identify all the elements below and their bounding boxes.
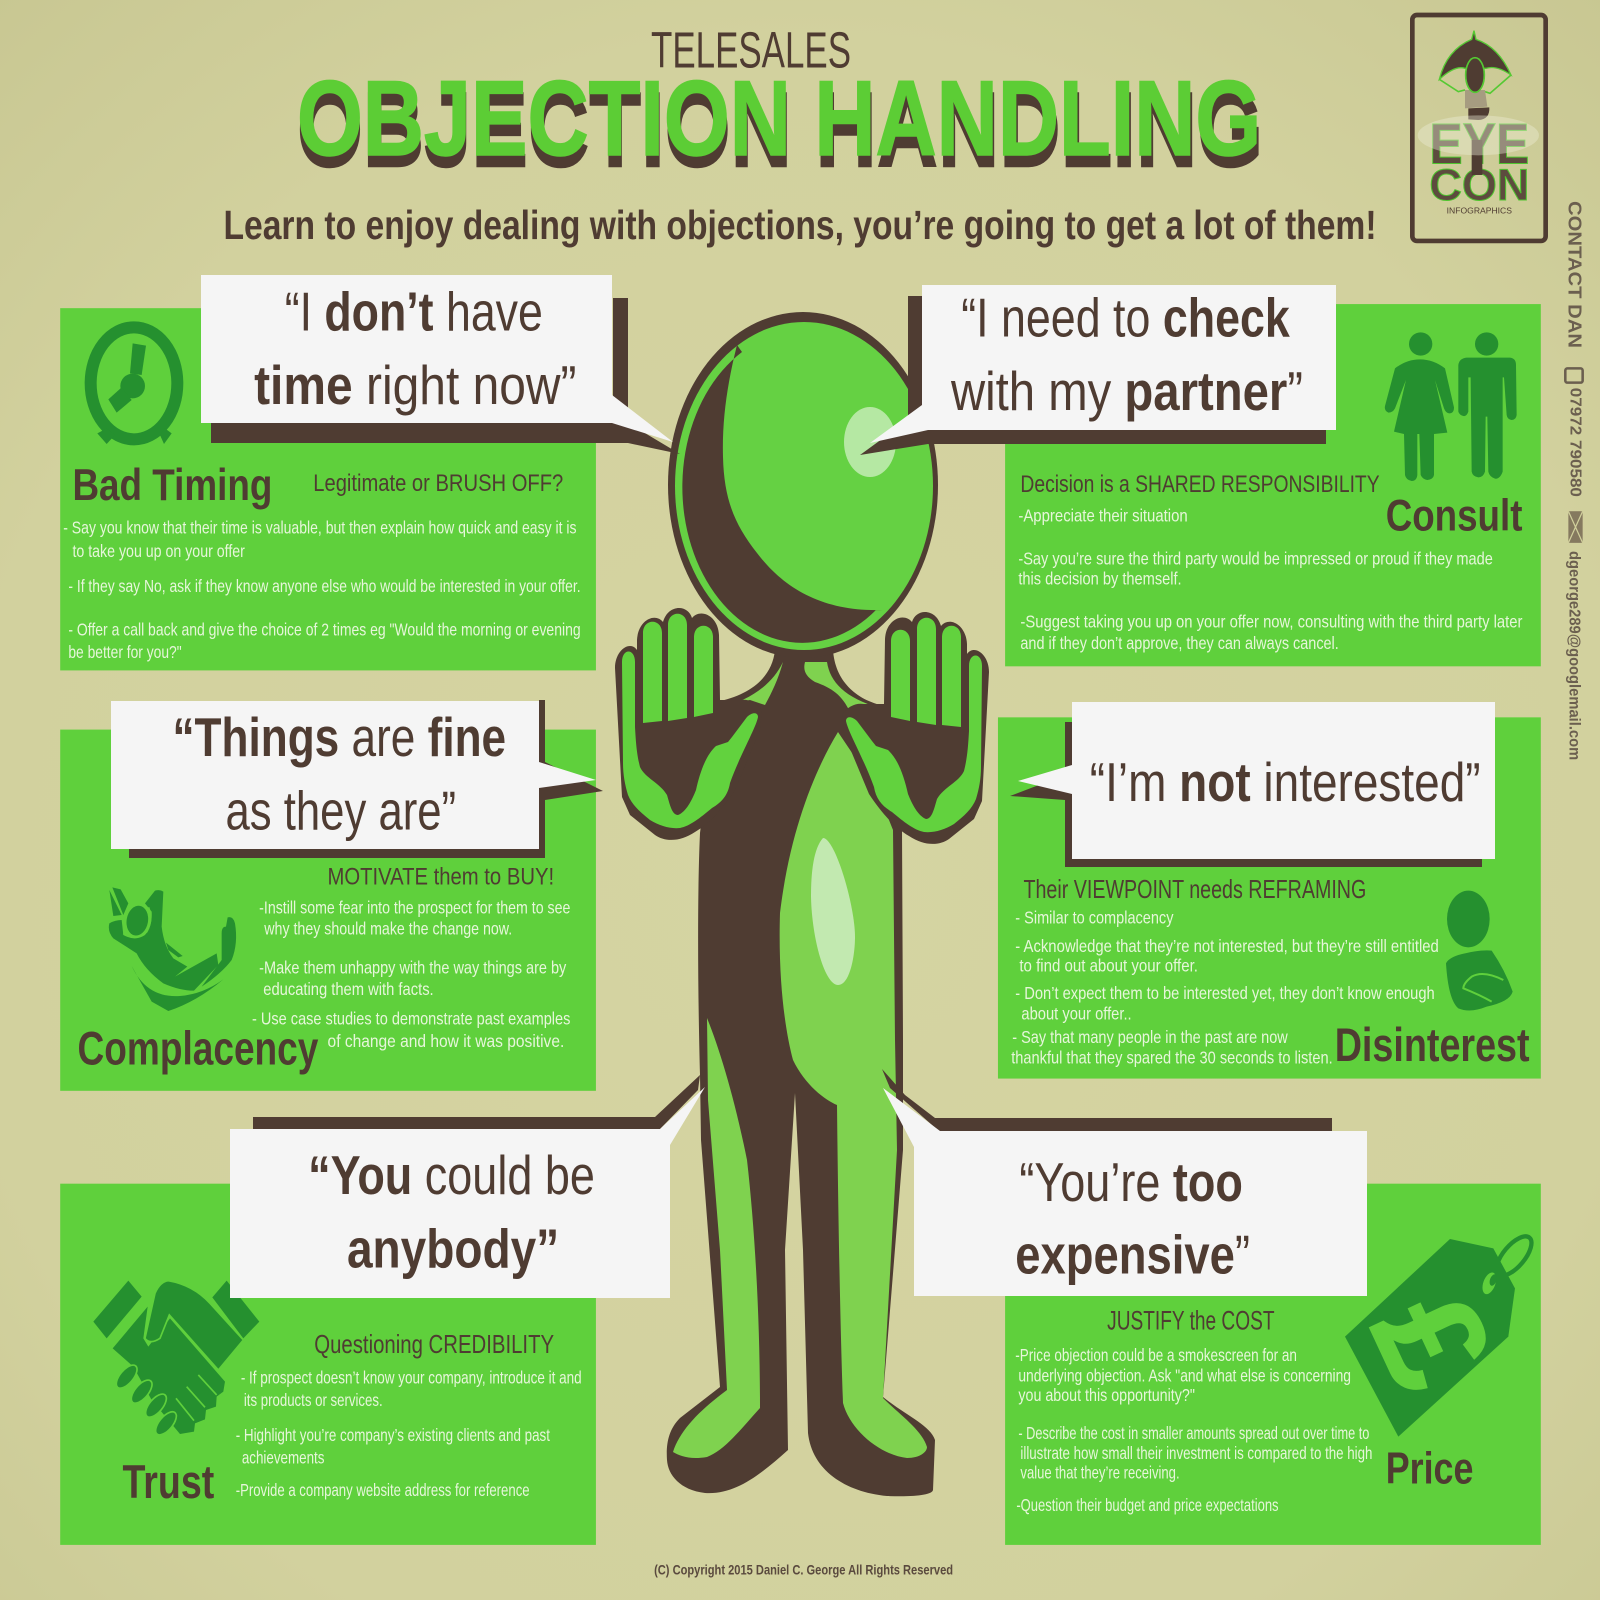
copyright footer: (C) Copyright 2015 Daniel C. George All Rights Reserved xyxy=(654,1562,953,1578)
title: Objection Handling: OBJECTION HANDLING xyxy=(297,58,1261,178)
panel advice text: about your offer.. xyxy=(1021,1003,1132,1023)
icon: clock xyxy=(91,327,177,444)
panel advice text xyxy=(63,518,581,662)
callout: Things are fine as they are: as they are” xyxy=(226,780,456,842)
callout: Things are fine as they are: “Things are fine xyxy=(172,706,506,768)
panel advice text xyxy=(1011,907,1439,1067)
callout: Things are fine as they are xyxy=(111,700,603,858)
icon: envelope xyxy=(1568,511,1583,543)
panel heading: Consult xyxy=(1386,490,1522,541)
panel heading: Bad Timing xyxy=(72,459,272,510)
callout: I need to check with my partner: with my partner” xyxy=(950,360,1303,422)
panel advice text: achievements xyxy=(242,1447,325,1467)
panel: complacency xyxy=(60,730,596,1091)
panel advice text: - Highlight you’re company’s existing clients and past xyxy=(236,1425,550,1445)
panel advice text: -Make them unhappy with the way things are by xyxy=(259,957,567,977)
callout: You're too expensive: expensive” xyxy=(1015,1223,1250,1285)
panel subheading: Questioning CREDIBILITY xyxy=(314,1331,554,1359)
panel heading: Price xyxy=(1386,1443,1473,1494)
panel advice text: -Question their budget and price expectations xyxy=(1016,1495,1279,1515)
torso highlight xyxy=(811,838,855,985)
left leg xyxy=(673,1018,760,1458)
panel advice text: -Price objection could be a smokescreen for an xyxy=(1015,1345,1297,1365)
panel advice text: illustrate how small their investment is compared to the high xyxy=(1020,1443,1372,1463)
subtitle: Learn to enjoy dealing with objections, you’re going to get a lot of them! xyxy=(223,202,1377,248)
panel advice text: -Suggest taking you up on your offer now, consulting with the third party later xyxy=(1020,612,1523,632)
callout: I'm not interested xyxy=(1010,702,1495,867)
title: Objection Handling: OBJECTION HANDLING xyxy=(297,69,1263,189)
panel advice text: of change and how it was positive. xyxy=(328,1031,564,1051)
icon: couple xyxy=(1385,332,1517,481)
logo: Eye Con Infographics: CON xyxy=(1429,161,1529,210)
panel heading: Disinterest xyxy=(1335,1019,1530,1071)
panel advice text: to find out about your offer. xyxy=(1019,955,1198,975)
callout: You're too expensive: “You’re too xyxy=(1019,1151,1243,1213)
panel subheading: Legitimate or BRUSH OFF? xyxy=(313,470,563,497)
callout: I don't have time right now xyxy=(201,275,680,454)
panel advice text: - Acknowledge that they’re not interested, but they’re still entitled xyxy=(1015,936,1439,956)
icon: price tag xyxy=(1340,1231,1538,1437)
contact phone number: 07972 790580 xyxy=(1566,388,1583,497)
left hand xyxy=(615,608,762,840)
panel advice text: thankful that they spared the 30 seconds to listen. xyxy=(1011,1047,1333,1067)
panel: trust xyxy=(60,1184,596,1545)
panel: disinterest xyxy=(998,717,1541,1079)
panel heading: Complacency xyxy=(78,1022,318,1074)
panel advice text: - Say that many people in the past are now xyxy=(1012,1027,1288,1047)
panel advice text: - If prospect doesn’t know your company, introduce it and xyxy=(241,1368,582,1388)
callout: I don't have time right now: time right now” xyxy=(254,354,577,416)
callout: You could be anybody: anybody” xyxy=(347,1217,559,1279)
head xyxy=(668,312,938,658)
panel advice text: - Offer a call back and give the choice of 2 times eg "Would the morning or evening xyxy=(68,620,581,640)
panel advice text: - Use case studies to demonstrate past examples xyxy=(252,1008,571,1028)
panel: consult xyxy=(1005,304,1541,666)
panel advice text: - Don’t expect them to be interested yet, they don’t know enough xyxy=(1015,983,1435,1003)
contact email: dgeorge289@googlemail.com xyxy=(1565,551,1582,760)
callout: I need to check with my partner: “I need to check xyxy=(961,287,1290,349)
panel advice text: - Similar to complacency xyxy=(1015,907,1174,927)
panel advice text xyxy=(252,897,571,1051)
panel heading: Trust xyxy=(122,1456,215,1508)
panel subheading: JUSTIFY the COST xyxy=(1107,1306,1274,1336)
panel advice text: this decision by themself. xyxy=(1018,569,1182,589)
panel advice text: - Say you know that their time is valuable, but then explain how quick and easy it is xyxy=(63,518,577,538)
logo: Eye Con Infographics xyxy=(1412,15,1546,241)
panel advice text: -Instill some fear into the prospect for them to see xyxy=(259,897,570,917)
panel advice text xyxy=(236,1368,582,1500)
panel advice text: - If they say No, ask if they know anyone else who would be interested in your offer. xyxy=(68,576,581,596)
title: Telesales: TELESALES xyxy=(651,21,851,78)
panel subheading: MOTIVATE them to BUY! xyxy=(328,864,554,891)
icon: person with folded arms xyxy=(1446,891,1513,1010)
panel advice text: to take you up on your offer xyxy=(72,541,245,561)
callout: I don't have time right now: “I don’t have xyxy=(285,281,543,343)
panel advice text: and if they don’t approve, they can always cancel. xyxy=(1020,633,1339,653)
panel advice text xyxy=(1015,1345,1372,1515)
icon: phone xyxy=(1565,368,1583,383)
panel advice text: -Appreciate their situation xyxy=(1018,505,1188,525)
panel advice text: you about this opportunity?" xyxy=(1018,1385,1195,1405)
panel advice text: value that they’re receiving. xyxy=(1020,1463,1180,1483)
figure body silhouette xyxy=(667,650,935,1496)
icon: reclining person xyxy=(109,887,236,1011)
panel advice text: -Provide a company website address for reference xyxy=(236,1480,530,1500)
panel advice text: its products or services. xyxy=(244,1390,383,1410)
panel advice text: underlying objection. Ask "and what else is concerning xyxy=(1018,1366,1351,1386)
icon: price tag: £ xyxy=(1340,1270,1523,1413)
callout: I need to check with my partner xyxy=(860,285,1336,455)
central figure xyxy=(615,312,989,1496)
callout: You could be anybody: “You could be xyxy=(308,1144,595,1206)
panel subheading: Decision is a SHARED RESPONSIBILITY xyxy=(1020,471,1380,498)
contact heading: CONTACT DAN xyxy=(1564,201,1585,348)
logo: Eye Con Infographics: INFOGRAPHICS xyxy=(1447,205,1512,215)
callout: You could be anybody xyxy=(230,1075,705,1298)
torso and right leg xyxy=(780,732,927,1458)
right hand xyxy=(842,612,989,844)
callout: You're too expensive xyxy=(882,1069,1367,1296)
panel: price xyxy=(1005,1184,1541,1545)
neck highlights xyxy=(720,662,880,730)
icon: handshake xyxy=(93,1281,259,1438)
panel advice text: - Describe the cost in smaller amounts spread out over time to xyxy=(1018,1423,1369,1443)
logo: Eye Con Infographics: EYE xyxy=(1429,112,1529,176)
panel advice text: why they should make the change now. xyxy=(263,919,512,939)
callout: I'm not interested: “I’m not interested” xyxy=(1090,751,1481,813)
panel advice text: -Say you’re sure the third party would be impressed or proud if they made xyxy=(1018,548,1493,568)
sidebar: contact details xyxy=(1564,201,1585,760)
panel advice text: be better for you?" xyxy=(68,642,182,662)
panel subheading: Their VIEWPOINT needs REFRAMING xyxy=(1023,876,1366,904)
panel: bad timing xyxy=(60,308,596,670)
panel advice text xyxy=(1018,505,1523,653)
panel advice text: educating them with facts. xyxy=(263,979,434,999)
